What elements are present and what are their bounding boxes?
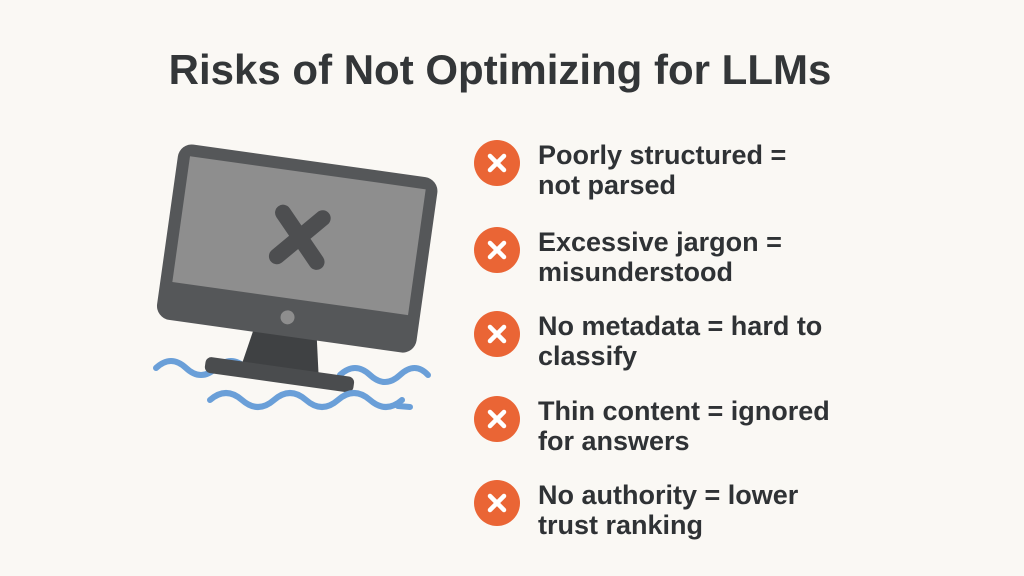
waves front xyxy=(210,393,410,407)
item 1: Poorly structured = xyxy=(538,140,786,170)
title: Risks of Not Optimizing for LLMs xyxy=(169,46,831,93)
item 2: misunderstood xyxy=(538,257,733,287)
item 4: Thin content = ignored xyxy=(538,396,830,426)
waves back xyxy=(156,361,428,382)
item 2 xyxy=(474,227,782,287)
item 4: for answers xyxy=(538,426,690,456)
item 3: No metadata = hard to xyxy=(538,311,822,341)
monitor xyxy=(149,143,439,401)
item 5 xyxy=(474,480,798,540)
item 5: trust ranking xyxy=(538,510,703,540)
item 4 xyxy=(474,396,830,456)
item 3: classify xyxy=(538,341,637,371)
item 2: Excessive jargon = xyxy=(538,227,782,257)
item 1 xyxy=(474,140,786,200)
item 3 xyxy=(474,311,822,371)
item 5: No authority = lower xyxy=(538,480,798,510)
item 1: not parsed xyxy=(538,170,676,200)
